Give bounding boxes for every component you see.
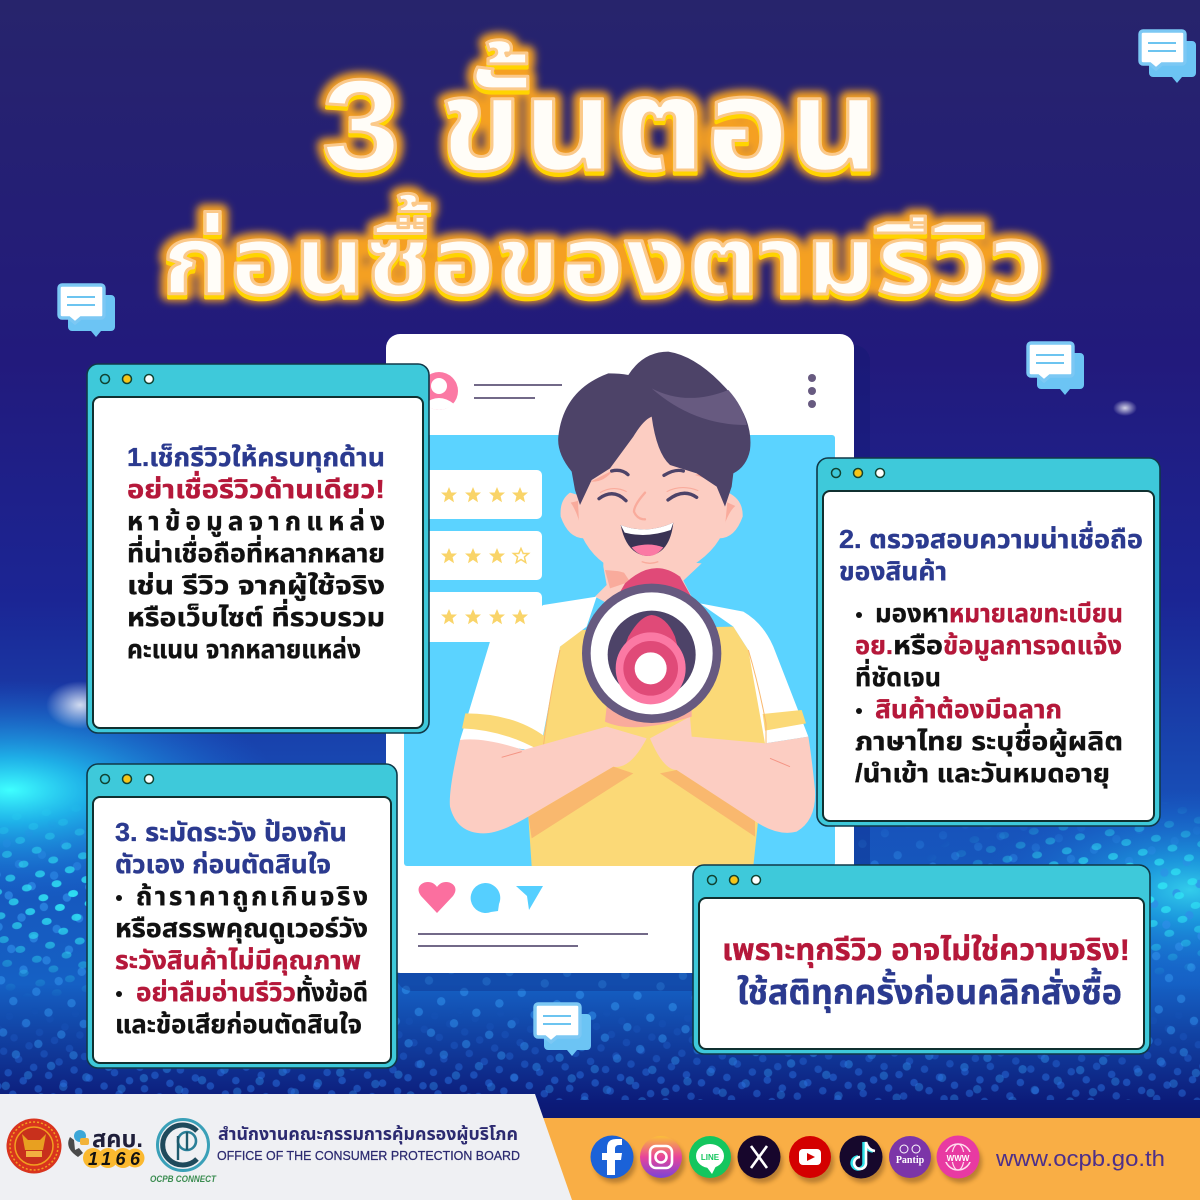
- step 2 heading: 2. ตรวจสอบความน่าเชื่อถือ: [839, 521, 1143, 554]
- nose: [634, 493, 645, 519]
- rating rows: [410, 470, 542, 642]
- white fill: ก่อนซื้อของตามรีวิว: [162, 193, 1045, 315]
- user name lines: [474, 385, 562, 398]
- icon: share: [516, 886, 543, 910]
- icon: youtube: [789, 1136, 831, 1178]
- gold edge: 3 ขั้นตอน: [322, 44, 880, 202]
- step 2 body: หรือ: [893, 630, 943, 660]
- step 3 heading: ตัวเอง ก่อนตัดสินใจ: [115, 849, 331, 879]
- icon: chat bubble right: [1028, 343, 1084, 395]
- logo: hotline 1166: 1166: [88, 1149, 141, 1169]
- icon: website: WWW: [947, 1154, 970, 1163]
- step 3 body: ระวังสินค้าไม่มีคุณภาพ: [115, 945, 361, 976]
- panel: step 1: [87, 364, 429, 733]
- avatar: [420, 372, 458, 410]
- icon: line: [689, 1136, 731, 1178]
- icon: tiktok: [840, 1136, 882, 1178]
- step 2 body: ข้อมูลการจดแจ้ง: [943, 630, 1122, 661]
- glow: ก่อนซื้อของตามรีวิว: [162, 193, 1045, 315]
- step 3 body: ถ้าราคาถูกเกินจริง: [136, 881, 368, 912]
- icon: pantip: Pantip: [896, 1155, 925, 1166]
- caption lines: [418, 934, 648, 946]
- icon: website: [936, 1136, 980, 1178]
- megaphone back: [613, 568, 695, 603]
- step 2 body: หมายเลขทะเบียน: [949, 598, 1123, 628]
- step 1 heading: 1.เช็กรีวิวให้ครบทุกด้าน: [127, 442, 385, 473]
- step 1 body: คะแนน จากหลายแหล่ง: [127, 634, 361, 664]
- photo background: [404, 435, 835, 866]
- step 2 body: มองหา: [875, 598, 949, 628]
- logo: hotline 1166: [68, 1126, 144, 1169]
- gold edge: ก่อนซื้อของตามรีวิว: [162, 197, 1045, 319]
- step 3 body: หรือสรรพคุณดูเวอร์วัง: [115, 913, 368, 944]
- star on top of sleeve: [512, 609, 528, 624]
- arms: [450, 727, 647, 833]
- icon: comment: [471, 883, 500, 913]
- menu dots: [808, 374, 816, 408]
- social icons: [590, 1136, 982, 1183]
- gold edge: [162, 44, 1045, 319]
- step 3 heading: 3. ระมัดระวัง ป้องกัน: [115, 817, 347, 847]
- step 2 heading: ของสินค้า: [839, 556, 947, 586]
- right sleeve: [700, 603, 808, 743]
- icon: pantip: [889, 1136, 931, 1178]
- step 1 warning: อย่าเชื่อรีวิวด้านเดียว!: [127, 471, 385, 504]
- neck: [595, 553, 702, 607]
- step 2 body: /นำเข้า และวันหมดอายุ: [855, 758, 1110, 789]
- step 2 body: ที่ชัดเจน: [855, 659, 941, 692]
- character with megaphone: [450, 352, 815, 866]
- step 1 body: หรือเว็บไซต์ ที่รวบรวม: [127, 599, 385, 632]
- logo: OCPB connect: OCPB CONNECT: [150, 1174, 217, 1184]
- face: [577, 413, 730, 576]
- step 2 heading: [839, 521, 1143, 586]
- eye creases: [600, 488, 698, 493]
- organisation name Thai: สำนักงานคณะกรรมการคุ้มครองผู้บริโภค: [218, 1124, 518, 1145]
- logo: hotline 1166: สคบ.: [92, 1126, 143, 1153]
- icon: instagram: [640, 1136, 682, 1178]
- icon: chat bubble top right: [1140, 31, 1196, 83]
- icon: chat bubble left: [59, 285, 115, 337]
- ears: [561, 493, 584, 538]
- shirt: [528, 627, 768, 866]
- white fill: 3 ขั้นตอน: [322, 40, 880, 198]
- step 3 body: ทั้งข้อดี: [296, 975, 368, 1007]
- shirt seams: [543, 650, 766, 747]
- panel: social post illustration: [386, 334, 854, 973]
- glow: 3 ขั้นตอน: [322, 40, 880, 198]
- step 2 body: [855, 598, 1123, 789]
- icon: chat bubble bottom: [535, 1004, 591, 1056]
- hair: [558, 352, 750, 507]
- logo: seal: [6, 1118, 62, 1174]
- white fill: [162, 40, 1045, 315]
- footer band: white: [0, 1094, 572, 1200]
- arm shadows: [528, 767, 633, 838]
- hand under megaphone: [605, 707, 692, 727]
- website url: www.ocpb.go.th: [995, 1146, 1165, 1171]
- brows: [612, 470, 683, 475]
- step 1 body: [127, 506, 385, 664]
- megaphone: [582, 584, 721, 723]
- left sleeve: [460, 597, 597, 752]
- step 1 body: เช่น รีวิว จากผู้ใช้จริง: [127, 570, 385, 601]
- organisation name English: OFFICE OF THE CONSUMER PROTECTION BOARD: [217, 1148, 520, 1163]
- glow: [162, 40, 1045, 315]
- step 2 body: ภาษาไทย ระบุชื่อผู้ผลิต: [855, 723, 1123, 757]
- step 2 body: สินค้าต้องมีฉลาก: [875, 694, 1062, 724]
- panel: step 2: [817, 458, 1160, 826]
- eyes: [599, 493, 697, 501]
- step 1 body: หาข้อมูลจากแหล่ง: [127, 506, 385, 537]
- footer band: orange: [520, 1118, 1200, 1200]
- step 2 body: อย.: [855, 630, 893, 660]
- chin crease: [642, 562, 658, 563]
- closing advice: ใช้สติทุกครั้งก่อนคลิกสั่งซื้อ: [737, 967, 1122, 1013]
- closing warning: เพราะทุกรีวิว อาจไม่ใช่ความจริง!: [722, 934, 1130, 968]
- logo: OCPB connect: [150, 1120, 217, 1184]
- hair highlight: [652, 388, 747, 425]
- panel: step 3: [87, 764, 397, 1068]
- step 3 body: และข้อเสียก่อนตัดสินใจ: [115, 1009, 362, 1039]
- step 3 body: [115, 881, 368, 1039]
- step 3 heading: [115, 817, 347, 879]
- mouth: [621, 523, 673, 556]
- icon: facebook: [590, 1136, 634, 1178]
- panel: closing message: [693, 865, 1150, 1054]
- icon: X: [738, 1136, 780, 1178]
- icon: line: LINE: [701, 1153, 720, 1162]
- icon: heart: [419, 882, 455, 913]
- title: [162, 40, 1045, 319]
- step 1 body: ที่น่าเชื่อถือที่หลากหลาย: [127, 535, 385, 568]
- post card: [386, 334, 854, 973]
- forehead shadow: [591, 470, 710, 482]
- step 3 body: อย่าลืมอ่านรีวิว: [136, 977, 296, 1007]
